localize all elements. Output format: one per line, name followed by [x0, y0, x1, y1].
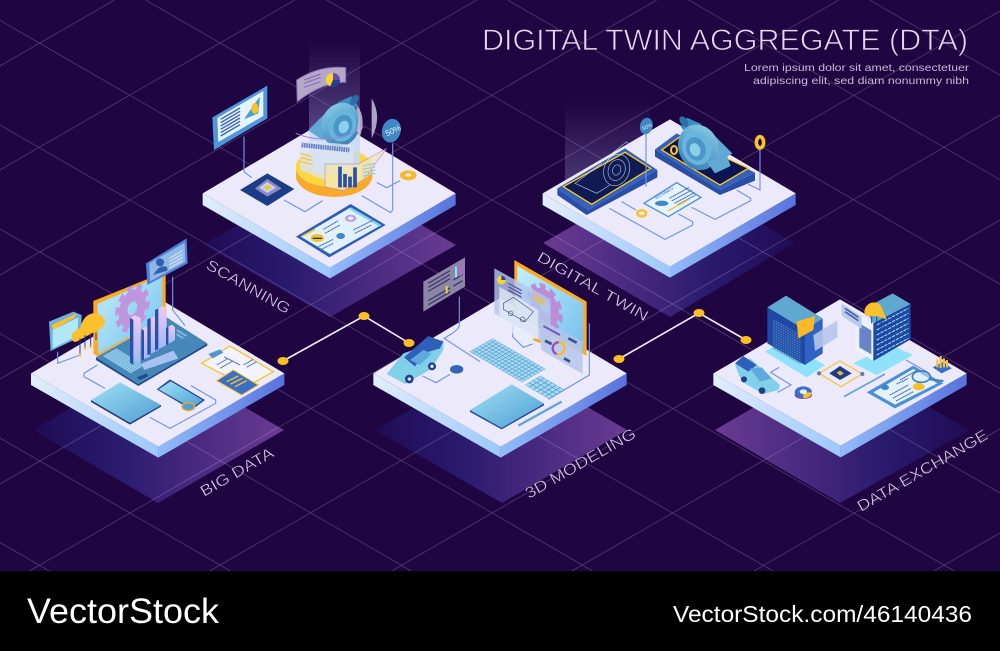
globe disc: [450, 365, 463, 374]
stylus pen: [844, 374, 885, 397]
report tablet with magnifier: [867, 366, 943, 408]
shadow: scanning: [203, 172, 456, 317]
gear small: [637, 210, 646, 216]
label: big data: BIG DATA: [198, 444, 278, 500]
circuit lines: [771, 360, 927, 392]
donut chart: [795, 386, 812, 399]
gear on stem: [756, 137, 764, 148]
translucent panels: [494, 268, 583, 374]
subtitle: Lorem ipsum dolor sit amet, consectetuer: [744, 62, 970, 74]
tablet: [91, 382, 161, 425]
gear: [377, 170, 417, 188]
monitor: [514, 260, 587, 356]
folder: [797, 316, 815, 338]
profile card: [146, 238, 188, 285]
keyboard: [469, 338, 564, 399]
connector: 3D modeling to data exchange: [614, 309, 752, 363]
label: 3D modeling: 3D MODELING: [522, 425, 639, 502]
phone with 3D turbine: [655, 115, 755, 195]
label: scanning: SCANNING: [203, 257, 293, 318]
floating panes: [813, 303, 862, 351]
subtitle: adipiscing elit, sed diam nonummy nibh: [753, 75, 969, 87]
panel: digital twin: [543, 100, 796, 278]
bar chart on laptop: [130, 306, 187, 365]
shadow: data exchange: [715, 357, 970, 503]
laptop: [93, 272, 207, 386]
cloud: [72, 313, 105, 356]
folder: [49, 312, 82, 351]
panel: data exchange: [713, 293, 967, 457]
clipboard: [202, 346, 273, 395]
subtitle: [744, 62, 970, 87]
phone: [157, 379, 205, 411]
label: data exchange: DATA EXCHANGE: [854, 427, 991, 515]
circuit lines: [423, 297, 589, 399]
car: [387, 336, 443, 384]
phone with turbine wireframe: [557, 142, 657, 215]
cloud: [864, 302, 887, 330]
grey spec card: [423, 257, 465, 312]
shadow: 3D modeling: [375, 357, 627, 503]
label: digital twin: DIGITAL TWIN: [534, 249, 651, 325]
50% bubble: [362, 117, 403, 213]
hologram arcs: [357, 98, 377, 138]
bubble: [638, 116, 655, 187]
tablet: [470, 384, 544, 429]
panel: big data: [31, 238, 284, 458]
mini bar chart: [933, 356, 952, 373]
shadow: digital twin: [543, 170, 795, 317]
car: [735, 356, 780, 394]
footer bar: VectorStock.com/46140436: [673, 601, 972, 627]
scan card on the left: [212, 86, 267, 178]
title: DIGITAL TWIN AGGREGATE (DTA): [482, 24, 968, 57]
circuit lines: [58, 277, 216, 428]
50% bubble: 50%: [384, 123, 402, 138]
circuit lines: [609, 150, 760, 239]
data cycle with chip: [817, 361, 864, 387]
dashboard card: [296, 204, 386, 257]
accuracy card: ACCURACY: [654, 186, 675, 200]
floating pie chart card: [297, 67, 346, 102]
chip: [240, 173, 323, 212]
footer bar: [0, 571, 1000, 651]
bubble: 50%: [642, 122, 654, 132]
panel: scanning: [203, 40, 456, 278]
accuracy card: [644, 183, 701, 217]
footer bar: VectorStock: [27, 592, 220, 631]
connector: big data to 3D modeling: [278, 312, 414, 365]
data server left: [765, 296, 825, 377]
shadow: big data: [33, 357, 284, 503]
scanner cylinder with turbine: [296, 93, 387, 197]
data server right: [853, 293, 913, 375]
stylus pen: [518, 402, 562, 426]
panel: 3D modeling: [373, 257, 627, 458]
